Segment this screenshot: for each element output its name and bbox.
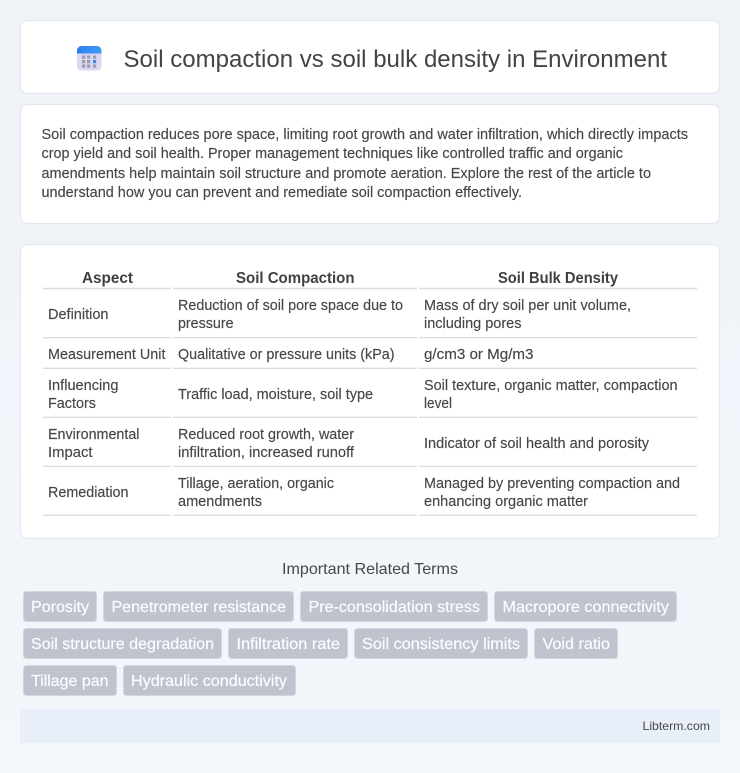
intro text: understand how you can prevent and remediate soil compaction effectively. xyxy=(42,185,522,201)
tag: hydraulic conductivity xyxy=(124,666,296,696)
footer source: Libterm.com xyxy=(642,719,710,733)
row: influencing factors: Influencing xyxy=(48,378,118,394)
tag: tillage pan xyxy=(24,666,116,696)
row: measurement unit xyxy=(48,347,534,363)
row: remediation: amendments xyxy=(178,494,262,510)
row: remediation xyxy=(48,476,680,510)
tag: hydraulic conductivity: Hydraulic conductivity xyxy=(131,673,287,690)
row: measurement unit: Qualitative or pressure units (kPa) xyxy=(178,347,394,363)
row: remediation: Managed by preventing compaction and xyxy=(424,476,680,492)
row: definition: Mass of dry soil per unit volume, xyxy=(424,298,631,314)
footer bar xyxy=(20,709,720,743)
intro text: Soil compaction reduces pore space, limiting root growth and water infiltration, which directly impacts xyxy=(42,127,688,143)
row: influencing factors: Soil texture, organic matter, compaction xyxy=(424,378,678,394)
row: environmental impact xyxy=(48,427,650,461)
tag: porosity xyxy=(24,592,96,622)
heading: important related terms: Important Related Terms xyxy=(282,561,458,578)
row: influencing factors: level xyxy=(424,396,452,412)
tag: soil consistency limits: Soil consistency limits xyxy=(362,636,520,653)
row: definition xyxy=(48,298,631,332)
row: remediation: Remediation xyxy=(48,485,128,501)
related term tags xyxy=(24,592,676,696)
row: definition: Definition xyxy=(48,307,108,323)
tag: infiltration rate xyxy=(228,628,348,658)
row: measurement unit: Measurement Unit xyxy=(48,347,166,363)
row: remediation: Tillage, aeration, organic xyxy=(178,476,334,492)
tag: pre-consolidation stress: Pre-consolidation stress xyxy=(308,599,480,616)
row: definition: Reduction of soil pore space due to xyxy=(178,298,403,314)
intro text: crop yield and soil health. Proper management techniques like controlled traffic and organic xyxy=(42,146,623,162)
tag: soil structure degradation: Soil structure degradation xyxy=(31,636,214,653)
row: influencing factors xyxy=(48,378,678,412)
tag: porosity: Porosity xyxy=(31,599,89,616)
icon: calendar xyxy=(77,46,102,70)
tag: pre-consolidation stress xyxy=(300,592,488,622)
row: environmental impact: Indicator of soil health and porosity xyxy=(424,436,650,452)
title: Soil compaction vs soil bulk density in Environment xyxy=(124,46,667,73)
tag: macropore connectivity xyxy=(494,592,676,622)
tag: tillage pan: Tillage pan xyxy=(31,673,108,690)
table header row: Aspect xyxy=(82,270,134,287)
row: influencing factors: Factors xyxy=(48,396,96,412)
row: environmental impact: Environmental xyxy=(48,427,140,443)
tag: infiltration rate: Infiltration rate xyxy=(236,636,340,653)
row: environmental impact: Impact xyxy=(48,445,92,461)
table header row: Soil Compaction xyxy=(236,270,354,287)
tag: void ratio: Void ratio xyxy=(542,636,610,653)
row: definition: pressure xyxy=(178,316,234,332)
intro text xyxy=(42,127,688,201)
row: definition: including pores xyxy=(424,316,522,332)
table header row: Soil Bulk Density xyxy=(498,270,618,287)
panel: introduction xyxy=(20,104,720,224)
table header row xyxy=(82,270,618,287)
row: environmental impact: infiltration, increased runoff xyxy=(178,445,355,461)
row: influencing factors: Traffic load, moisture, soil type xyxy=(178,387,373,403)
panel: comparison table xyxy=(20,244,720,538)
tag: penetrometer resistance: Penetrometer resistance xyxy=(112,599,286,616)
header panel xyxy=(20,20,720,94)
row: measurement unit: g/cm3 or Mg/m3 xyxy=(424,347,534,363)
row: remediation: enhancing organic matter xyxy=(424,494,588,510)
tag: void ratio xyxy=(534,628,618,658)
tag: macropore connectivity: Macropore connectivity xyxy=(502,599,669,616)
tag: penetrometer resistance xyxy=(104,592,294,622)
intro text: amendments help maintain soil structure and promote aeration. Explore the rest of the article to xyxy=(42,166,651,182)
tag: soil structure degradation xyxy=(24,628,222,658)
tag: soil consistency limits xyxy=(354,628,528,658)
row: environmental impact: Reduced root growth, water xyxy=(178,427,354,443)
